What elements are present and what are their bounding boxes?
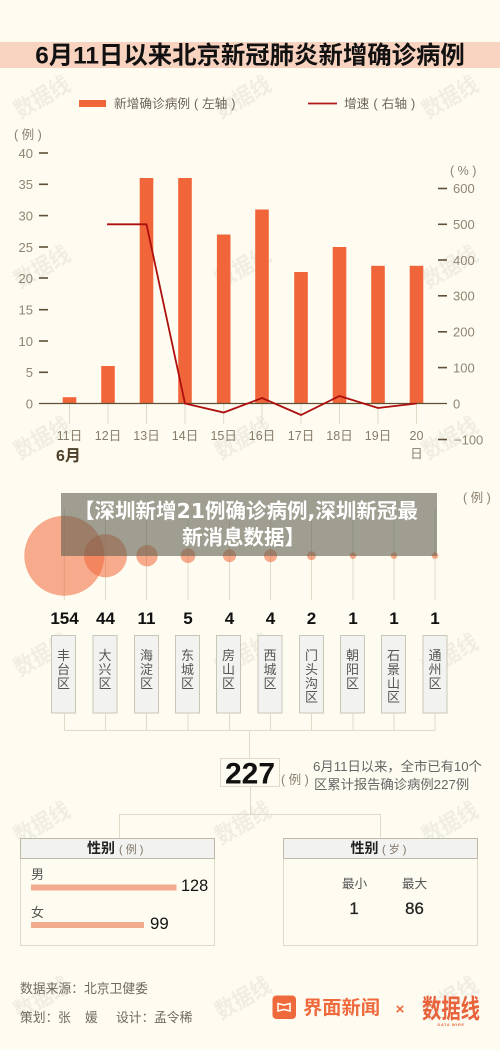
date labels: 18日: [326, 429, 353, 443]
legend: [79, 96, 415, 111]
bubble chart: cases by district: [24, 491, 491, 713]
right axis: 100: [453, 360, 475, 376]
district name boxes: 区: [57, 676, 70, 691]
district values: 5: [183, 609, 193, 628]
total callout: 227: [225, 758, 275, 790]
left axis: 5: [26, 365, 33, 380]
total callout: 区累计报告确诊病例227例: [314, 777, 469, 792]
logo: data wire: DATA WIRE: [437, 1022, 465, 1027]
watermarks: 数据线: [415, 407, 483, 466]
watermarks: 数据线: [415, 967, 483, 1026]
district values: 1: [389, 609, 399, 628]
panel: gender: [20, 838, 214, 946]
district name boxes: 区: [140, 676, 153, 691]
right axis: 0: [453, 396, 460, 412]
source and credits: 设计：: [116, 1010, 154, 1025]
watermarks: 数据线: [415, 236, 483, 295]
connector lines to total: [64, 713, 435, 838]
date labels: 13日: [133, 429, 160, 443]
logo: jiemian news: 界面新闻: [303, 997, 380, 1019]
district name boxes: 淀: [140, 662, 153, 677]
panel: age: 最大: [402, 877, 427, 891]
watermarks: 数据线: [208, 236, 276, 295]
bars: [63, 178, 423, 404]
district name boxes: 区: [387, 690, 400, 704]
left axis: 30: [19, 208, 33, 224]
district name boxes: 区: [98, 676, 112, 691]
district name boxes: 台: [57, 662, 70, 677]
right axis: 400: [453, 253, 475, 268]
logo: data wire: 数据线: [422, 994, 480, 1024]
district name boxes: 山: [387, 676, 400, 691]
date labels: 19日: [365, 429, 391, 443]
source and credits: 张: [58, 1010, 71, 1025]
watermarks: 数据线: [7, 624, 75, 683]
district name boxes: 区: [181, 676, 194, 691]
watermarks: 数据线: [208, 624, 276, 683]
district name boxes: 西: [263, 648, 277, 663]
watermarks: 数据线: [7, 967, 75, 1026]
district name boxes: 兴: [98, 662, 112, 677]
district values: 154: [50, 609, 79, 628]
district values: 2: [307, 609, 316, 628]
district values: 4: [225, 609, 235, 628]
right axis: 600: [453, 181, 475, 196]
left axis: 15: [19, 302, 33, 318]
panel: gender: 男: [31, 867, 44, 882]
district name boxes: 沟: [305, 676, 318, 691]
chart: new cases and growth rate: [14, 128, 483, 465]
watermarks: 数据线: [7, 407, 75, 466]
left axis: 10: [19, 334, 33, 349]
watermarks: 数据线: [415, 624, 483, 683]
date labels: 20: [410, 429, 423, 443]
banner overlay: 【深圳新增21例确诊病例,深圳新冠最: [74, 499, 418, 523]
left axis: 25: [19, 240, 33, 255]
chart: new cases and growth rate: ( 例 ): [14, 128, 42, 142]
panel: age: 性别: [350, 840, 378, 856]
district name boxes: 丰: [57, 648, 70, 663]
panel: gender: 女: [31, 905, 44, 920]
district values: 11: [138, 609, 155, 628]
watermarks: 数据线: [208, 66, 276, 125]
left axis: 40: [19, 146, 33, 161]
district name boxes: 州: [428, 662, 442, 677]
district name boxes: 景: [387, 662, 400, 677]
date labels: 17日: [288, 429, 314, 443]
left axis: 0: [26, 396, 33, 412]
logo: jiemian news: [272, 996, 405, 1019]
source and credits: 媛: [85, 1010, 98, 1025]
district name boxes: 城: [263, 662, 277, 677]
panel: gender: 性别: [87, 840, 115, 856]
watermarks: 数据线: [208, 407, 276, 466]
left axis: 35: [19, 177, 33, 192]
district name boxes: 门: [305, 648, 318, 663]
date guide lines: [70, 404, 416, 424]
source and credits: 孟令稀: [154, 1010, 193, 1025]
right axis: −100: [454, 432, 483, 448]
left axis: 20: [19, 271, 33, 286]
district name boxes: 区: [263, 676, 277, 691]
district name boxes: 城: [181, 662, 194, 677]
district name boxes: 区: [305, 690, 318, 704]
legend: 增速 ( 右轴 ): [344, 97, 415, 111]
chart: new cases and growth rate: ( % ): [450, 164, 476, 178]
growth line: [107, 224, 416, 415]
district values: 44: [96, 609, 115, 628]
district name boxes: [52, 636, 447, 713]
district values: 1: [430, 609, 440, 628]
logo: jiemian news: ×: [396, 1001, 405, 1018]
legend: 新增确诊病例 ( 左轴 ): [114, 96, 235, 111]
source and credits: 数据来源：北京卫健委: [20, 981, 148, 996]
date labels: 16日: [249, 429, 275, 443]
total callout: ( 例 ): [281, 773, 309, 787]
district values: [50, 609, 440, 628]
district values: 1: [348, 609, 358, 628]
date labels: [57, 429, 423, 461]
date labels: 日: [410, 447, 423, 461]
source and credits: 策划：: [20, 1010, 58, 1025]
date labels: 12日: [95, 429, 121, 443]
month label: 6月: [56, 448, 81, 465]
title: 6月11日以来北京新冠肺炎新增确诊病例: [35, 42, 465, 70]
district values: 4: [266, 609, 276, 628]
right axis: 200: [453, 324, 475, 340]
banner overlay: [61, 493, 437, 556]
district name boxes: 东: [181, 648, 194, 663]
panel: age: ( 岁 ): [382, 842, 406, 856]
right axis: 500: [453, 217, 475, 232]
watermarks: 数据线: [7, 236, 75, 295]
district name boxes: 区: [428, 676, 442, 691]
panel: age: 最小: [342, 877, 367, 891]
date labels: 15日: [210, 429, 237, 443]
district name boxes: 头: [305, 662, 318, 677]
bubble chart: cases by district: ( 例 ): [463, 491, 491, 505]
district name boxes: 通: [428, 648, 442, 663]
panel: gender: 128: [181, 877, 208, 895]
watermarks: 数据线: [7, 792, 75, 851]
date labels: 11日: [57, 429, 82, 443]
watermarks: 数据线: [7, 66, 75, 125]
panel: age: [284, 838, 478, 946]
district name boxes: 石: [387, 648, 400, 663]
watermarks: 数据线: [208, 967, 276, 1026]
watermarks: 数据线: [208, 792, 276, 851]
district name boxes: 房: [222, 648, 235, 663]
date labels: 14日: [172, 429, 198, 443]
left axis: [19, 146, 48, 412]
zero baseline: [39, 402, 447, 404]
watermarks: 数据线: [415, 66, 483, 125]
banner overlay: 新消息数据】: [182, 526, 305, 550]
source and credits: [20, 981, 193, 1025]
district name boxes: 山: [222, 662, 235, 677]
panel: gender: ( 例 ): [119, 842, 143, 856]
panel: gender: 99: [150, 914, 169, 933]
right axis: [438, 181, 483, 448]
district name boxes: 区: [346, 676, 359, 691]
right axis: 300: [453, 288, 475, 304]
watermarks: 数据线: [415, 792, 483, 851]
district name boxes: 朝: [346, 648, 359, 663]
district name boxes: 阳: [346, 662, 359, 677]
total callout: [220, 758, 482, 792]
district name boxes: 区: [222, 676, 235, 691]
panel: age: 1: [349, 899, 359, 918]
logo: data wire: [422, 994, 480, 1027]
total callout: 6月11日以来，全市已有10个: [313, 758, 482, 774]
district name boxes: 海: [140, 648, 153, 663]
district name boxes: 大: [98, 648, 112, 663]
panel: age: 86: [405, 899, 424, 918]
